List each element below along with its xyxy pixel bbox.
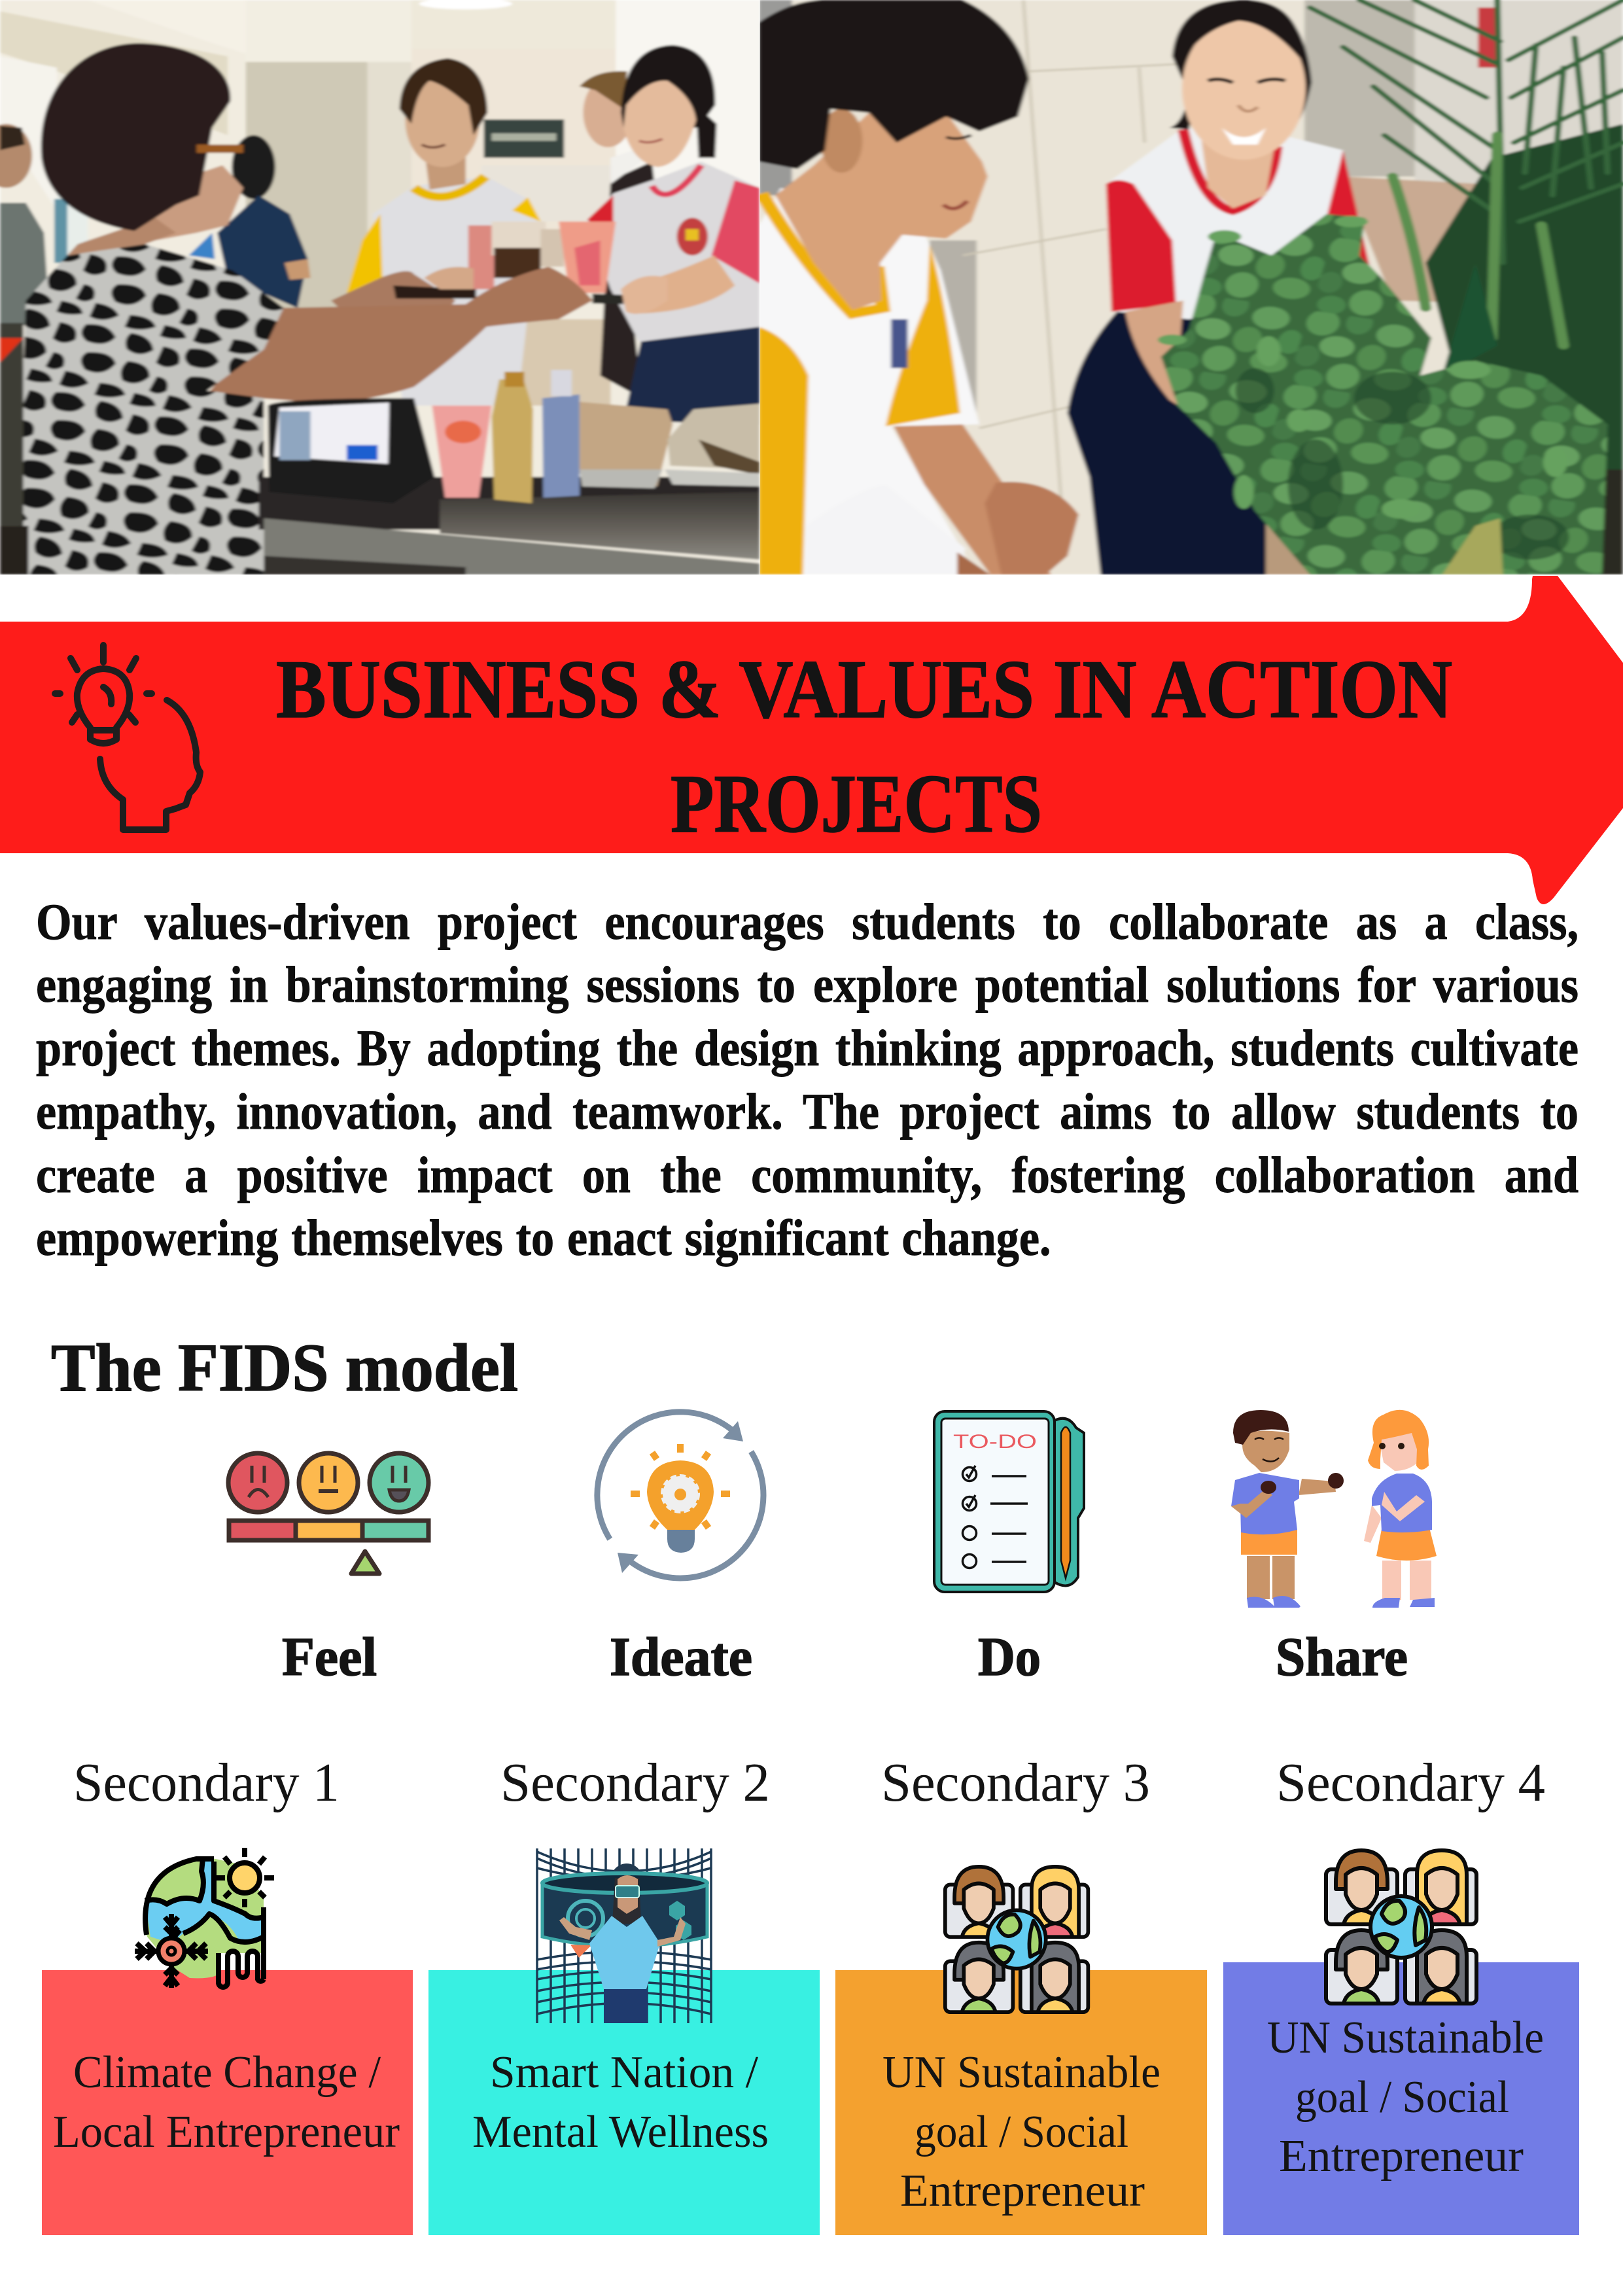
icon: Do to-do list: TO-DO <box>953 1431 1037 1453</box>
icon: climate globe with sun and snowflake <box>135 1848 274 1988</box>
text: Secondary 4 theme <box>1267 2013 1544 2181</box>
panel: Secondary 1 red box <box>42 1970 413 2235</box>
icon: people and globe (Secondary 3) <box>945 1867 1088 2012</box>
text block: project description: create a positive impact on the community, fostering collaboration and <box>36 1146 1579 1203</box>
banner arrow <box>0 576 1623 904</box>
title: PROJECTS <box>671 758 1042 850</box>
text: Secondary 3 theme: goal / Social <box>915 2107 1128 2157</box>
icon: head with lightbulb <box>55 645 200 830</box>
label: Secondary 4: Secondary 4 <box>1276 1752 1545 1813</box>
panel: Secondary 4 blue box <box>1223 1962 1579 2235</box>
heading: The FIDS model: The FIDS model <box>51 1330 518 1405</box>
text: Secondary 1 theme: Climate Change / <box>73 2047 381 2098</box>
photo: students serving customer at tuck shop <box>0 0 761 574</box>
label: Feel: Feel <box>282 1627 377 1687</box>
text block: project description: empowering themselves to enact significant change. <box>36 1209 1051 1266</box>
text: Secondary 2 theme: Smart Nation / <box>490 2047 759 2098</box>
icon: Ideate lightbulb with cycle arrows <box>597 1412 763 1578</box>
panel: Secondary 2 cyan box <box>428 1970 820 2235</box>
text: Secondary 1 theme: Local Entrepreneur <box>53 2107 400 2157</box>
title: BUSINESS & VALUES IN ACTION <box>276 644 1452 735</box>
icon: people and globe (Secondary 4) <box>1326 1850 1476 2004</box>
icon: Share two children <box>1231 1410 1437 1608</box>
text block: project description: Our values-driven project encourages students to collaborate as a class, <box>36 893 1579 950</box>
text: Secondary 2 theme <box>472 2047 769 2157</box>
icon: VR smart nation figure <box>537 1848 711 2023</box>
text: Secondary 4 theme: goal / Social <box>1295 2072 1509 2123</box>
text: Secondary 1 theme <box>53 2047 400 2157</box>
label: Secondary 2: Secondary 2 <box>500 1752 770 1813</box>
label: Do: Do <box>978 1627 1041 1687</box>
label: Share: Share <box>1276 1627 1408 1687</box>
text: Secondary 4 theme: Entrepreneur <box>1279 2131 1524 2181</box>
photo: students tending plants <box>759 0 1623 574</box>
text: Secondary 3 theme <box>882 2047 1161 2216</box>
panel: Secondary 3 orange box <box>835 1970 1207 2235</box>
icon: Do to-do list <box>934 1411 1084 1592</box>
text: Secondary 3 theme: Entrepreneur <box>900 2166 1145 2216</box>
text: Secondary 2 theme: Mental Wellness <box>472 2107 769 2157</box>
text block: project description: engaging in brainstorming sessions to explore potential solutions for various <box>36 956 1579 1013</box>
label: Secondary 3: Secondary 3 <box>881 1752 1150 1813</box>
text: Secondary 3 theme: UN Sustainable <box>882 2047 1161 2098</box>
text block: project description: empathy, innovation, and teamwork. The project aims to allow students to <box>36 1083 1579 1140</box>
title <box>276 644 1452 850</box>
label: Ideate: Ideate <box>610 1627 752 1687</box>
text block: project description: project themes. By adopting the design thinking approach, students cultivate <box>36 1019 1579 1076</box>
icon: Feel mood scale <box>228 1453 428 1574</box>
text: Secondary 4 theme: UN Sustainable <box>1267 2013 1544 2063</box>
label: Secondary 1: Secondary 1 <box>73 1752 340 1813</box>
text block: project description <box>36 893 1579 1267</box>
